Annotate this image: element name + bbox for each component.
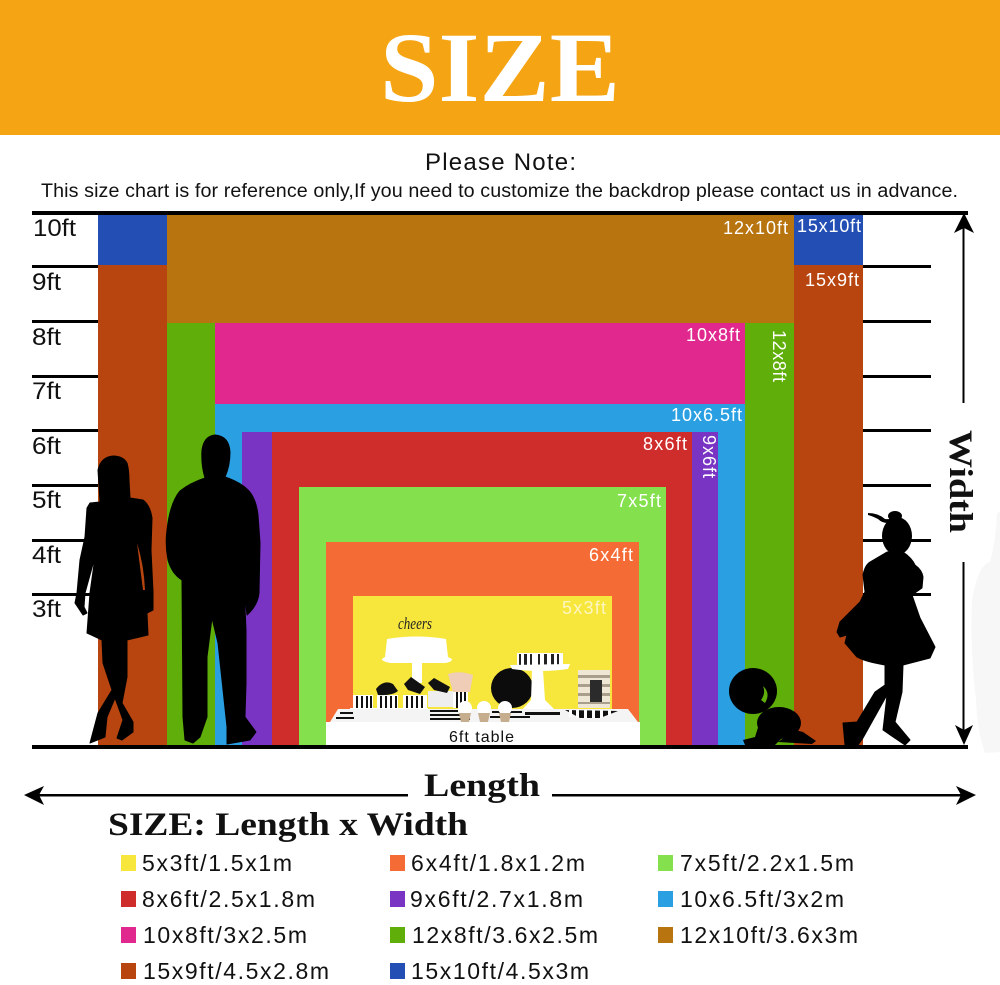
- small cupcakes: [458, 701, 512, 722]
- legend item: 12x10ft: 12x10ft/3.6x3m: [680, 922, 858, 948]
- rectangle size labels: 7x5ft: [617, 491, 661, 511]
- table label: 6ft table: [449, 729, 514, 746]
- ruler foot labels: 9ft: [32, 269, 61, 296]
- legend item: 15x9ft: 15x9ft/4.5x2.8m: [143, 958, 329, 984]
- rect: 8x6ft: [272, 432, 692, 746]
- rect: 15x9ft: [98, 265, 863, 746]
- table cover: [326, 722, 640, 746]
- silhouette: woman: [75, 456, 153, 743]
- length label: Length: [424, 768, 540, 804]
- legend item: 15x10ft: 15x10ft/4.5x3m: [411, 958, 589, 984]
- rect: 12x10ft: [167, 214, 794, 746]
- title: SIZE: [380, 12, 620, 123]
- striped tablecloth: [330, 709, 638, 722]
- ruler foot labels: 3ft: [32, 596, 61, 623]
- cupcake stand: [510, 653, 570, 710]
- silhouette: girl: [837, 511, 935, 745]
- cake topper text: cheers: [398, 614, 432, 633]
- faint background figure: [972, 512, 1000, 753]
- rectangle size labels: 10x6.5ft: [671, 405, 742, 425]
- ruler foot labels: [32, 215, 76, 623]
- striped box: [578, 670, 610, 708]
- rectangle size labels: 9x6ft: [699, 435, 719, 478]
- ruler foot labels: 6ft: [32, 433, 61, 460]
- table with dessert display: [326, 614, 640, 746]
- rect: 10x6.5ft: [215, 404, 745, 746]
- legend item: 12x8ft: 12x8ft/3.6x2.5m: [412, 922, 598, 948]
- ruler foot labels: 10ft: [33, 215, 76, 242]
- rect: 15x10ft: [98, 214, 863, 746]
- rectangle size labels: 10x8ft: [686, 325, 740, 345]
- rectangle size labels: 8x6ft: [643, 434, 687, 454]
- silhouette: baby: [729, 668, 816, 745]
- legend: [121, 850, 858, 984]
- width label: Width: [942, 430, 978, 533]
- rectangle size labels: 12x10ft: [723, 218, 788, 238]
- legend heading: SIZE: Length x Width: [108, 807, 468, 843]
- rectangle size labels: 12x8ft: [769, 330, 789, 382]
- rectangle size labels: 15x9ft: [805, 270, 859, 290]
- rect: 10x8ft: [215, 323, 745, 746]
- ruler foot labels: 4ft: [32, 542, 61, 569]
- baseline: [32, 745, 968, 749]
- rect: 7x5ft: [299, 487, 666, 746]
- utensil cup: [448, 672, 473, 708]
- legend item: 6x4ft: 6x4ft/1.8x1.2m: [411, 850, 585, 876]
- rect: 6x4ft: [326, 542, 639, 746]
- ruler foot labels: 8ft: [32, 324, 61, 351]
- rect: 9x6ft: [242, 432, 718, 746]
- note heading: Please Note:: [425, 149, 576, 176]
- note text: This size chart is for reference only,If you need to customize the backdrop please contact us in advance.: [41, 180, 958, 202]
- rect: 12x8ft: [167, 323, 794, 746]
- legend item: 5x3ft: 5x3ft/1.5x1m: [142, 850, 292, 876]
- legend item: 9x6ft: 9x6ft/2.7x1.8m: [410, 886, 583, 912]
- legend item: 10x6.5ft: 10x6.5ft/3x2m: [680, 886, 844, 912]
- length arrow: [24, 786, 976, 805]
- legend item: 8x6ft: 8x6ft/2.5x1.8m: [142, 886, 315, 912]
- rect: 5x3ft: [353, 596, 612, 746]
- cake stand: [382, 636, 452, 683]
- silhouette: man: [166, 435, 260, 744]
- legend item: 10x8ft: 10x8ft/3x2.5m: [143, 922, 307, 948]
- ruler foot labels: 7ft: [32, 378, 61, 405]
- rectangle size labels: 6x4ft: [589, 545, 633, 565]
- header banner: [0, 0, 1000, 135]
- ruler lines: [32, 211, 968, 596]
- rectangle size labels: [562, 216, 861, 618]
- rectangle size labels: 5x3ft: [562, 598, 606, 618]
- black paper fan: [491, 668, 533, 708]
- rectangle size labels: 15x10ft: [797, 216, 861, 236]
- legend item: 7x5ft: 7x5ft/2.2x1.5m: [680, 850, 854, 876]
- cupcake tray: [350, 677, 454, 722]
- width arrow: [954, 213, 974, 745]
- ruler foot labels: 5ft: [32, 487, 61, 514]
- size chart nested rectangles: [98, 214, 863, 746]
